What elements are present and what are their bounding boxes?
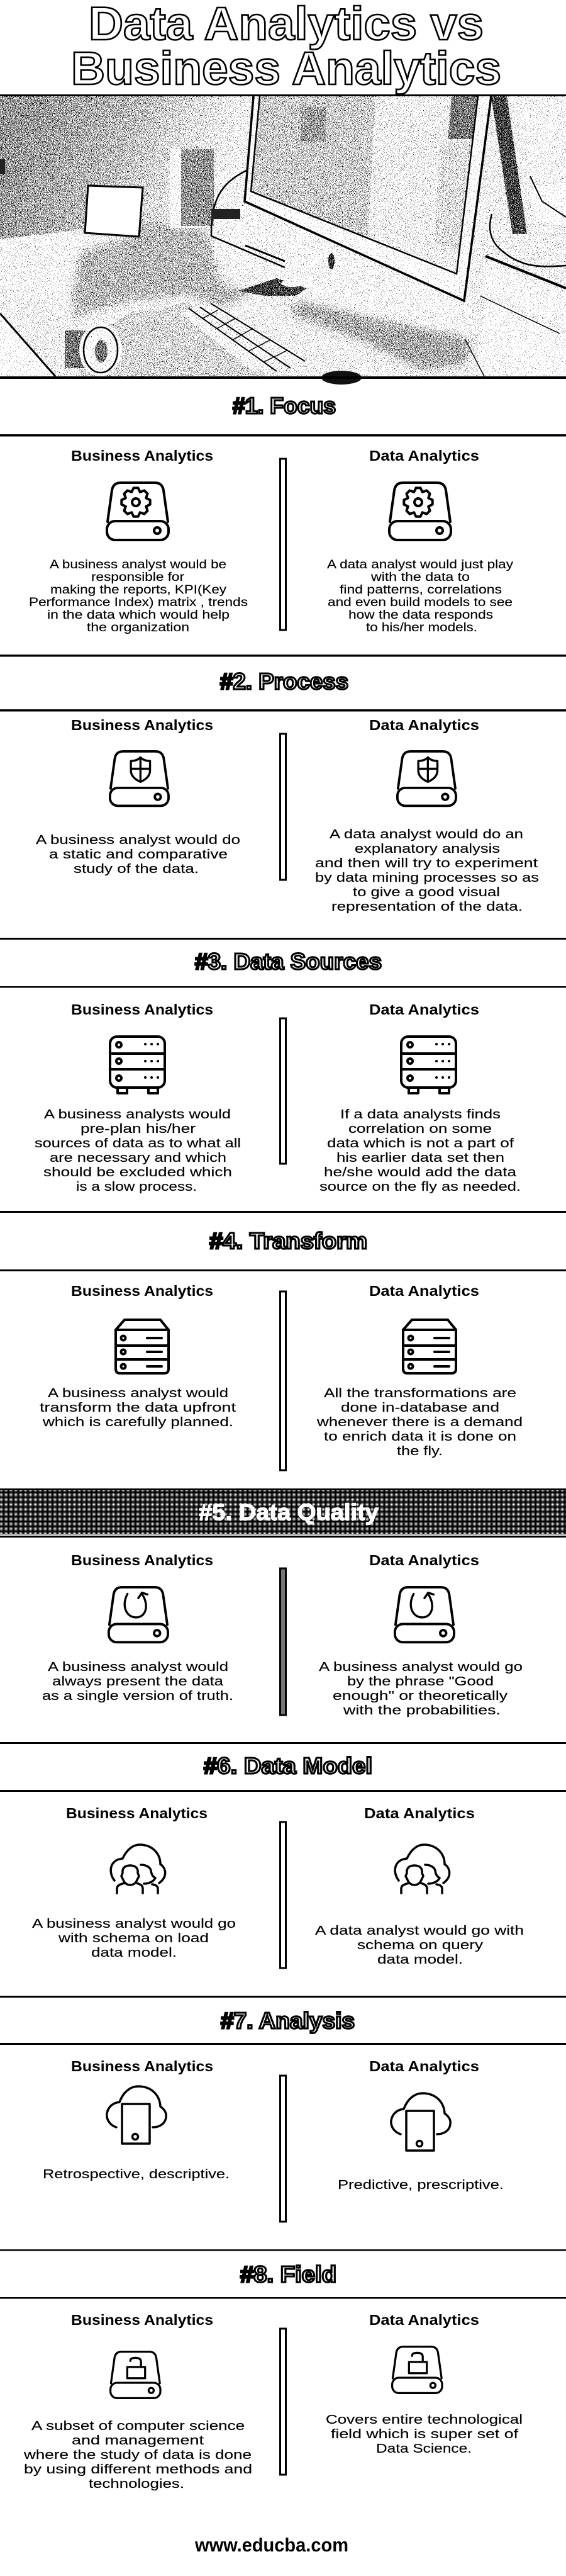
description text: If a data analysts finds <box>340 1107 501 1122</box>
description text <box>316 1386 523 1458</box>
description text: transform the data upfront <box>40 1400 236 1415</box>
icon: drive with open padlock <box>111 2352 160 2398</box>
description text: enough" or theoretically <box>333 1689 508 1703</box>
icon: server rack <box>110 1037 165 1093</box>
column heading: Data Analytics <box>364 1805 475 1821</box>
description text: sources of data as to what all <box>35 1136 241 1150</box>
description text <box>29 558 248 634</box>
dark heading band <box>0 1488 566 1538</box>
description text: by the phrase "Good <box>347 1674 494 1689</box>
section heading: #7. Analysis: #7. Analysis <box>221 2008 355 2033</box>
icon: server stack <box>116 1320 169 1373</box>
description text: A data analyst would just play <box>327 558 514 571</box>
description text: a static and comparative <box>49 847 228 862</box>
description text: and then will try to experiment <box>315 856 538 870</box>
description text: Predictive, prescriptive. <box>338 2178 504 2192</box>
icon: drive with refresh arrow <box>109 1587 168 1642</box>
description text <box>315 1923 524 1967</box>
description text: A subset of computer science <box>31 2419 245 2433</box>
column divider <box>280 2076 286 2222</box>
description text: the organization <box>87 621 189 634</box>
description text <box>35 1107 241 1194</box>
column heading: Business Analytics <box>71 717 213 733</box>
panel: #7 Analysis <box>0 2008 566 2251</box>
description text: responsible for <box>91 571 185 584</box>
photo: desktop computer on a desk with keyboard and speaker <box>0 94 566 385</box>
column divider <box>280 459 286 630</box>
column divider <box>280 734 286 880</box>
icon: server stack <box>403 1320 456 1373</box>
description text: data model. <box>91 1945 177 1960</box>
description text: to give a good visual <box>353 885 500 899</box>
icon: cloud with two people <box>395 1845 450 1893</box>
description text: the fly. <box>397 1444 443 1458</box>
description text: and even build models to see <box>328 596 513 609</box>
column divider <box>280 2329 286 2475</box>
icon: drive with open padlock <box>392 2347 442 2393</box>
description text: should be excluded which <box>43 1165 232 1179</box>
column: Data Analytics <box>326 2312 523 2456</box>
icon: cloud with mobile device <box>391 2093 450 2151</box>
column heading: Data Analytics <box>369 1283 479 1299</box>
panel: #5 Data Quality <box>0 1488 566 1744</box>
description text <box>315 827 539 914</box>
section heading: #8. Field: #8. Field <box>240 2261 336 2287</box>
icon: server rack <box>401 1037 456 1093</box>
description text: A business analyst would go <box>319 1660 523 1674</box>
panel: #8 Field <box>0 2261 566 2491</box>
title: Business Analytics <box>71 42 501 94</box>
icon: cloud with mobile device <box>107 2086 166 2144</box>
description text: source on the fly as needed. <box>319 1179 521 1194</box>
column heading: Data Analytics <box>369 1001 479 1018</box>
column heading: Business Analytics <box>71 447 213 464</box>
column: Business Analytics <box>35 1001 241 1194</box>
description text: data model. <box>377 1952 463 1967</box>
description text: is a slow process. <box>76 1179 197 1194</box>
panel: #6 Data Model <box>0 1753 566 1998</box>
column heading: Data Analytics <box>369 447 479 464</box>
description text: data which is not a part of <box>327 1136 514 1150</box>
column divider <box>280 1291 286 1470</box>
description text: explanatory analysis <box>355 841 500 856</box>
column: Data Analytics <box>315 1805 524 1967</box>
description text: Covers entire technological <box>326 2412 523 2427</box>
photo line work <box>0 96 566 376</box>
column: Data Analytics <box>319 1001 521 1194</box>
description text: Retrospective, descriptive. <box>43 2167 230 2181</box>
panel: #1 Focus <box>0 393 566 657</box>
icon: drive with shield <box>110 751 169 806</box>
column: Business Analytics <box>42 1552 233 1703</box>
description text: done in-database and <box>341 1400 499 1415</box>
section heading: #6. Data Model: #6. Data Model <box>204 1753 372 1779</box>
description text: how the data responds <box>348 609 493 622</box>
description text: to his/her models. <box>366 621 477 634</box>
column divider <box>280 1822 286 1968</box>
icon: cloud with two people <box>111 1845 165 1893</box>
section heading: #3. Data Sources: #3. Data Sources <box>195 948 382 974</box>
description text <box>319 1660 523 1718</box>
description text: where the study of data is done <box>23 2448 252 2462</box>
description text: A business analyst would be <box>50 558 226 571</box>
column: Business Analytics <box>43 2058 230 2181</box>
description text: making the reports, KPI(Key <box>50 583 227 597</box>
panel: #2 Process <box>0 668 566 940</box>
section heading: #2. Process: #2. Process <box>220 668 348 694</box>
description text: with the data to <box>370 571 470 584</box>
column divider <box>280 1018 286 1164</box>
description text: with the probabilities. <box>343 1703 501 1718</box>
icon: drive with shield <box>397 751 456 806</box>
description text: his earlier data set then <box>336 1150 504 1165</box>
description text <box>42 1660 233 1703</box>
description text: representation of the data. <box>331 899 523 914</box>
description text: A business analyst would go <box>32 1916 236 1931</box>
column: Data Analytics <box>338 2058 504 2192</box>
description text: A data analyst would do an <box>330 827 523 841</box>
description text: A data analyst would go with <box>315 1923 524 1938</box>
column: Business Analytics <box>32 1805 236 1960</box>
description text: schema on query <box>357 1938 484 1952</box>
description text <box>40 1386 236 1429</box>
column heading: Business Analytics <box>66 1805 208 1821</box>
column: Business Analytics <box>40 1283 236 1429</box>
column: Data Analytics <box>319 1552 523 1718</box>
column: Data Analytics <box>327 447 514 634</box>
column heading: Data Analytics <box>369 2058 479 2074</box>
description text: to enrich data it is done on <box>324 1429 516 1444</box>
description text: A business analyst would <box>48 1660 228 1674</box>
description text: A business analysts would <box>44 1107 231 1122</box>
column heading: Data Analytics <box>369 1552 479 1568</box>
description text: Performance Index) matrix , trends <box>29 596 248 609</box>
icon: drive with gear <box>389 483 451 540</box>
description text <box>319 1107 521 1194</box>
column: Data Analytics <box>316 1283 523 1458</box>
section heading: #4. Transform: #4. Transform <box>209 1228 367 1254</box>
description text <box>326 2412 523 2456</box>
description text: by data mining processes so as <box>315 870 539 885</box>
column: Business Analytics <box>36 717 240 876</box>
description text: field which is super set of <box>331 2427 518 2441</box>
description text <box>32 1916 236 1960</box>
description text: whenever there is a demand <box>316 1415 523 1429</box>
column heading: Business Analytics <box>71 1001 213 1018</box>
column divider (dark) <box>280 1568 286 1715</box>
description text: in the data which would help <box>47 609 230 622</box>
description text: find patterns, correlations <box>340 583 502 597</box>
description text: he/she would add the data <box>324 1165 517 1179</box>
description text: A business analyst would do <box>36 833 240 847</box>
title <box>71 0 501 94</box>
column heading: Data Analytics <box>369 717 479 733</box>
description text: correlation on some <box>348 1122 492 1136</box>
column heading: Business Analytics <box>71 2312 213 2328</box>
description text: which is carefully planned. <box>42 1415 233 1429</box>
description text: are necessary and which <box>50 1150 226 1165</box>
column: Data Analytics <box>315 717 539 914</box>
column heading: Business Analytics <box>71 1552 213 1568</box>
panel: #4 Transform <box>0 1228 566 1470</box>
description text <box>23 2419 252 2491</box>
icon: drive with gear <box>107 483 169 540</box>
description text: All the transformations are <box>324 1386 516 1400</box>
section heading: #1. Focus: #1. Focus <box>233 393 336 419</box>
description text: with schema on load <box>58 1931 209 1945</box>
description text: study of the data. <box>74 862 199 876</box>
section heading: #5. Data Quality: #5. Data Quality <box>199 1499 379 1525</box>
column: Business Analytics <box>29 447 248 634</box>
description text: and management <box>72 2433 204 2448</box>
description text: by using different methods and <box>24 2462 252 2477</box>
description text: Data Science. <box>376 2441 472 2456</box>
panel: #3 Data Sources <box>0 948 566 1213</box>
description text: technologies. <box>89 2477 184 2491</box>
description text: pre-plan his/her <box>80 1122 196 1136</box>
column heading: Business Analytics <box>71 1283 213 1299</box>
description text: always present the data <box>52 1674 224 1689</box>
description text: as a single version of truth. <box>42 1689 233 1703</box>
column heading: Business Analytics <box>71 2058 213 2074</box>
footer: website: www.educba.com <box>194 2534 348 2556</box>
description text <box>327 558 514 634</box>
icon: drive with refresh arrow <box>395 1587 454 1642</box>
column heading: Data Analytics <box>369 2312 479 2328</box>
column: Business Analytics <box>23 2312 252 2491</box>
description text <box>36 833 240 876</box>
description text: A business analyst would <box>48 1386 228 1400</box>
